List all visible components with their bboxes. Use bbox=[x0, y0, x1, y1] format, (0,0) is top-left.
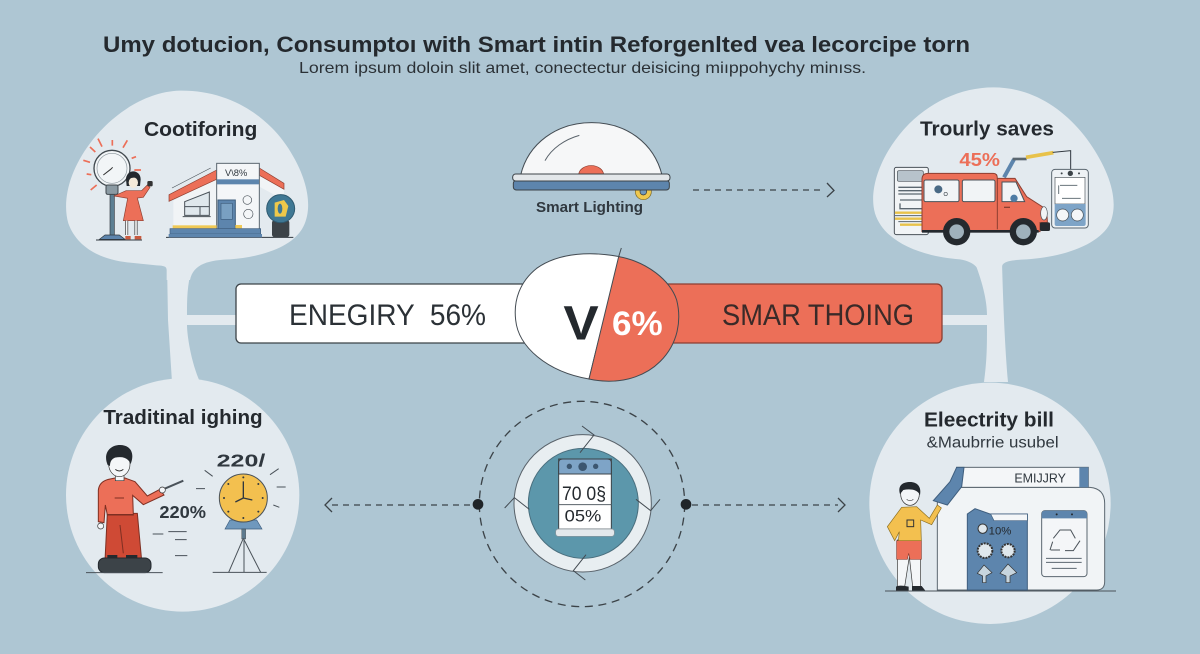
value: 220% left: 220% bbox=[159, 502, 206, 522]
versus badge: V bbox=[563, 296, 599, 350]
bar: energy bbox=[236, 284, 536, 343]
subheading: &Maubrrie usubel bbox=[927, 434, 1059, 451]
comparison bar bbox=[236, 248, 942, 381]
icon: red van bbox=[922, 151, 1071, 245]
icon: appliance: 70 0§ bbox=[562, 484, 606, 505]
bar: energy: ENEGIRY 56% bbox=[289, 299, 486, 332]
icon: large machine: EMIJJRY bbox=[1014, 471, 1066, 486]
icon: appliance: 05% bbox=[565, 507, 602, 526]
icon: smart lighting dome bbox=[513, 123, 670, 200]
connector network bbox=[167, 258, 1008, 382]
icon: person with yellow shirt bbox=[885, 482, 1116, 591]
icon: yellow clock on tripod bbox=[196, 469, 286, 572]
panel: traditional lighting bbox=[66, 378, 299, 612]
center cycle diagram bbox=[473, 401, 691, 607]
icon: house bbox=[166, 163, 295, 237]
value: 45%: 45% bbox=[959, 149, 1000, 170]
dashed right arrow bbox=[692, 498, 845, 512]
label: smart lighting: Smart Lighting bbox=[536, 200, 643, 216]
heading: cootiforing: Cootiforing bbox=[144, 119, 257, 141]
icon: large machine: 10% bbox=[989, 526, 1011, 538]
heading: electricity bill: Eleectrity bill bbox=[924, 410, 1054, 432]
panel: cootiforing bbox=[66, 91, 308, 280]
icon: house: V\8% bbox=[225, 168, 247, 178]
icon: meter device bbox=[1052, 169, 1088, 228]
heading: trourly saves: Trourly saves bbox=[920, 118, 1054, 140]
icon: large machine bbox=[933, 467, 1105, 590]
icon: gauge with woman bbox=[83, 139, 153, 240]
bar: smart thoing: SMAR THOING bbox=[722, 299, 914, 332]
versus badge bbox=[515, 248, 679, 381]
arrow: lighting to savings bbox=[693, 183, 834, 197]
value: 220% top: 220/ bbox=[217, 451, 265, 471]
ring bbox=[514, 435, 651, 572]
versus badge: 6% bbox=[612, 305, 663, 343]
panel: trourly saves bbox=[873, 87, 1114, 280]
icon: document panel bbox=[894, 167, 928, 235]
title: Umy dotucion, Consumptoı with Smart intin Reforgenlted vea lecorcipe torn bbox=[103, 32, 970, 57]
icon: appliance bbox=[556, 459, 614, 536]
subtitle: Lorem ipsum doloin slit amet, conectectur deisicing miıppohychy minıss. bbox=[299, 60, 866, 77]
bar: smart thoing bbox=[640, 284, 942, 343]
dashed left arrow bbox=[325, 498, 470, 512]
heading: traditional lighting: Traditinal ighing bbox=[103, 407, 263, 429]
icon: presenter bbox=[86, 445, 187, 573]
panel: electricity bill bbox=[869, 383, 1116, 624]
